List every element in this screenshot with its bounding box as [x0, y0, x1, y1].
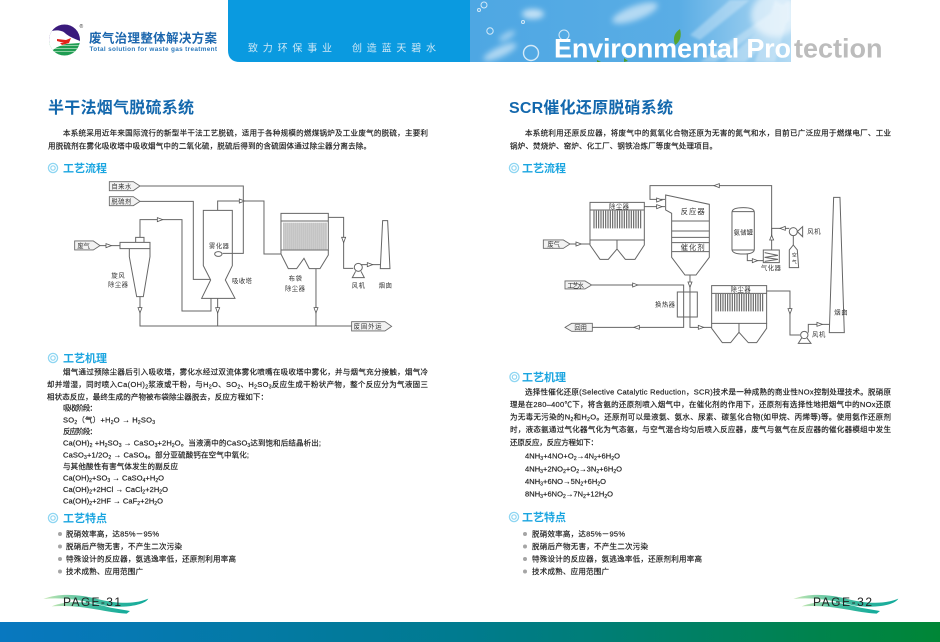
left mechanism text: 、H [241, 380, 254, 389]
chart: SCR denitrification flow diagram [543, 184, 848, 343]
right feature list: 脱硝效率高，达85%－95% [532, 529, 625, 539]
left heading: features [48, 511, 107, 525]
chart: semi-dry desulfurization flow diagram: 除尘器 [108, 279, 129, 288]
footer band [0, 622, 940, 642]
right mechanism text: 4NH [525, 452, 540, 461]
left mechanism text: 2 [108, 455, 111, 461]
left mechanism text: 3 [119, 443, 122, 449]
chart: SCR denitrification flow diagram: 回用 [574, 324, 587, 332]
chart: SCR denitrification flow diagram: 风机 [812, 329, 826, 338]
left mechanism text: 2 [142, 490, 145, 496]
left mechanism text: 达到饱和后结晶析出; [250, 438, 321, 448]
right mechanism text: 2 [583, 494, 586, 500]
chart: SCR denitrification flow diagram: 催化剂 [681, 243, 705, 252]
right mechanism text: +2NO [543, 465, 563, 474]
right heading: mechanism: 工艺机理 [522, 370, 566, 384]
right feature list: 特殊设计的反应器，氨逃逸率低，还原剂利用率高 [532, 554, 702, 564]
left mechanism text: O → H [114, 416, 138, 425]
left mechanism text: O [158, 474, 164, 483]
right mechanism text: 理是在280–400℃下，将含氨的还原剂喷入烟气中，在催化剂的作用下，还原剂有选择性地把烟气中的NOx还原 [510, 399, 892, 409]
left mechanism text: 浆液或干粉，与H [148, 379, 209, 389]
left mechanism text [47, 367, 428, 507]
right intro text [510, 128, 892, 151]
right mechanism text: 2 [580, 482, 583, 488]
left mechanism text: 3 [247, 443, 250, 449]
left mechanism text: +2H [140, 497, 154, 506]
right mechanism text: +O [566, 465, 576, 474]
right mechanism text: +12H [586, 490, 604, 499]
chart: semi-dry desulfurization flow diagram: 旋风 [111, 270, 125, 279]
right mechanism text: 和H [574, 413, 587, 422]
chart: semi-dry desulfurization flow diagram: 自来水 [111, 181, 132, 190]
chart: semi-dry desulfurization flow diagram: 废固外运 [354, 322, 382, 331]
left mechanism text: O [157, 497, 163, 506]
left mechanism text: 2 [89, 501, 92, 507]
right heading: features: 工艺特点 [522, 510, 566, 524]
header: blue slogan panel: 创造蓝天碧水 [352, 42, 436, 54]
left feature list: 特殊设计的反应器，氨逃逸率低，还原剂利用率高 [66, 554, 236, 564]
chart: SCR denitrification flow diagram: 氨储罐 [734, 227, 754, 236]
right mechanism text: 3 [540, 469, 543, 475]
left feature list [58, 529, 236, 576]
right mechanism text: 还原反应，反应方程如下： [510, 437, 598, 447]
right mechanism text: 4NH [525, 465, 540, 474]
chart: SCR denitrification flow diagram: 气 [792, 258, 797, 264]
header: logo: ® [80, 23, 84, 30]
right mechanism text: 2 [596, 469, 599, 475]
right heading: features [509, 510, 566, 524]
right mechanism text: O。还原剂可以是液氨、氨水、尿素、碳氢化合物(如甲烷、丙烯等)等。使用氨作还原剂 [590, 412, 891, 422]
left intro text: 用脱硫剂在雾化吸收塔中吸收烟气中的二氧化硫，脱硫后得到的含硫固体通过除尘器分离去除。 [48, 141, 371, 151]
right mechanism text: +6NO [543, 490, 563, 499]
right page number: PAGE-32 [813, 595, 872, 609]
chart: SCR denitrification flow diagram: 气化器 [761, 263, 782, 272]
left mechanism text: 2 [209, 385, 212, 391]
left heading: process flow: 工艺流程 [63, 161, 107, 175]
right feature list [523, 529, 702, 576]
left feature list: 技术成熟、应用范围广 [66, 566, 144, 576]
chart: semi-dry desulfurization flow diagram: 风机 [352, 281, 366, 290]
left mechanism text: 2 [111, 420, 114, 426]
left mechanism text: SO [257, 380, 269, 389]
left mechanism text: Ca(OH) [63, 497, 89, 506]
right mechanism text: 3 [540, 482, 543, 488]
chart: SCR denitrification flow diagram: 除尘器 [609, 201, 630, 210]
chart: semi-dry desulfurization flow diagram [75, 181, 392, 331]
chart: semi-dry desulfurization flow diagram: 烟囱 [379, 281, 392, 290]
right mechanism text: 2 [576, 469, 579, 475]
chart: SCR denitrification flow diagram: 空 [792, 252, 797, 258]
left mechanism text: 2 [145, 385, 148, 391]
right mechanism text: 选择性催化还原(Selective Catalytic Reduction，SCR)技术是一种成熟的商业性NOx控制处理技术。脱硝原 [525, 387, 892, 397]
left mechanism text: 4 [143, 478, 146, 484]
left mechanism text: → CaSO [111, 451, 145, 460]
left feature list: 脱硝后产物无害，不产生二次污染 [66, 541, 182, 551]
left heading: mechanism [48, 351, 107, 365]
header: company name: 废气治理整体解决方案 [89, 30, 217, 46]
chart: SCR denitrification flow diagram: 工艺水 [567, 280, 585, 289]
header: blue slogan panel [228, 0, 470, 62]
left mechanism text: 3 [107, 478, 110, 484]
chart: semi-dry desulfurization flow diagram: 除尘器 [285, 283, 306, 292]
right heading: process flow [509, 161, 566, 175]
right mechanism text: +6H [599, 465, 613, 474]
left heading: process flow [48, 161, 107, 175]
left feature list: 脱硝效率高，达85%－95% [66, 529, 159, 539]
right mechanism text: 3 [540, 494, 543, 500]
right mechanism text: 3 [540, 456, 543, 462]
right heading: process flow: 工艺流程 [522, 161, 566, 175]
left mechanism text: SO [63, 416, 74, 425]
right mechanism text: O [607, 490, 613, 499]
left mechanism text: 2 [138, 420, 141, 426]
left mechanism text: → CaSO [122, 439, 155, 448]
left mechanism text: +H [92, 439, 105, 448]
left mechanism text: 2 [74, 420, 77, 426]
right mechanism text: 2 [574, 456, 577, 462]
left mechanism text: Ca(OH) [63, 474, 89, 483]
left mechanism text: Ca(OH) [63, 485, 89, 494]
right feature list: 脱硝后产物无害，不产生二次污染 [532, 541, 648, 551]
chart: SCR denitrification flow diagram: 烟囱 [834, 308, 848, 317]
left page number [43, 595, 148, 614]
left mechanism text: 反应阶段： [63, 426, 97, 436]
left mechanism text: 3 [155, 443, 158, 449]
chart: semi-dry desulfurization flow diagram: 脱硫剂 [111, 196, 131, 205]
left mechanism text: +2HF → CaF [92, 497, 138, 506]
left mechanism text: 2 [154, 501, 157, 507]
right mechanism text: O [600, 477, 606, 486]
right page number [793, 595, 898, 614]
right mechanism text: 2 [587, 417, 590, 423]
banner title: tection [794, 34, 882, 64]
right mechanism text: +4NO+O [543, 452, 574, 461]
right mechanism text: 2 [570, 417, 573, 423]
right mechanism text: 为无毒无污染的N [510, 413, 570, 422]
left page title: 半干法烟气脱硫系统 [48, 98, 194, 117]
left mechanism text: 2 [105, 443, 108, 449]
left mechanism text: 相状态反应，最终生成的产物被布袋除尘器脱去，反应方程如下： [47, 392, 268, 402]
left mechanism text: 吸收阶段： [63, 403, 97, 413]
left mechanism text: 反应生成干粉状产物，整个反应分为气液固三 [272, 379, 428, 389]
left mechanism text: +2H [145, 485, 159, 494]
header: company name [89, 30, 218, 53]
chart: SCR denitrification flow diagram: 废气 [547, 239, 561, 248]
left heading: mechanism: 工艺机理 [63, 351, 107, 365]
left mechanism text: CaSO [63, 451, 84, 460]
left mechanism text: 与其他酸性有害气体发生的副反应 [63, 461, 178, 471]
left mechanism text: +2H [158, 439, 172, 448]
right mechanism text: 2 [604, 494, 607, 500]
right mechanism text: 2 [611, 456, 614, 462]
right mechanism text: →3N [579, 465, 596, 474]
left mechanism text: SO [108, 439, 119, 448]
left mechanism text: +SO [92, 474, 107, 483]
banner title: Environmental Pro [554, 34, 791, 64]
left mechanism text: SO [141, 416, 152, 425]
left mechanism text: 却并增湿，同时喷入Ca(OH) [47, 380, 145, 389]
right page title: SCR催化还原脱硝系统 [509, 98, 673, 117]
header: sky banner [470, 0, 799, 64]
right mechanism text: 4NH [525, 477, 540, 486]
left mechanism text: 2 [89, 478, 92, 484]
right mechanism text: →7N [566, 490, 583, 499]
right mechanism text: +6NO→5N [543, 477, 580, 486]
right mechanism text: 2 [563, 494, 566, 500]
right mechanism text: O [614, 452, 620, 461]
left intro text: 本系统采用近年来国际流行的新型半干法工艺脱硫，适用于各种规模的燃煤锅炉及工业废气的脱硫，主要利 [63, 128, 428, 138]
header: logo [49, 23, 84, 56]
right mechanism text: O [616, 465, 622, 474]
right heading: mechanism [510, 370, 566, 384]
left mechanism text: 2 [89, 490, 92, 496]
right mechanism text: 2 [613, 469, 616, 475]
left mechanism text: 2 [155, 478, 158, 484]
chart: semi-dry desulfurization flow diagram: 吸收塔 [232, 276, 253, 285]
left mechanism text: （气）+H [77, 415, 111, 425]
left mechanism text: 2 [237, 385, 240, 391]
header: company name: Total solution for waste gas treatment [90, 46, 218, 53]
left mechanism text: 2 [254, 385, 257, 391]
left mechanism text: O、SO [212, 380, 237, 389]
left mechanism text: 3 [269, 385, 272, 391]
left mechanism text: 烟气通过预除尘器后引入吸收塔，雾化水经过双流体雾化喷嘴在吸收塔中雾化，并与烟气充分接触，烟气冷 [63, 367, 428, 377]
left intro text [48, 128, 428, 151]
left mechanism text: 2 [172, 443, 175, 449]
left mechanism text: +H [145, 474, 155, 483]
left mechanism text: 2 [137, 501, 140, 507]
right mechanism text: 2 [597, 482, 600, 488]
right mechanism text: 2 [563, 469, 566, 475]
left mechanism text: +2HCl → CaCl [92, 485, 143, 494]
right intro text: 锅炉、焚烧炉、窑炉、化工厂、钢铁冶炼厂等废气处理项目。 [510, 141, 717, 151]
left mechanism text: O [162, 485, 168, 494]
left mechanism text: +1/2O [87, 451, 108, 460]
right mechanism text: 时，液态氨通过气化器气化为气态氨，与空气混合均匀后喷入反应器，废气与氨气在反应器的催化器模组中发生 [510, 424, 892, 434]
left page number: PAGE-31 [63, 595, 121, 609]
right mechanism text: +6H [583, 477, 597, 486]
right mechanism text: 2 [594, 456, 597, 462]
chart: semi-dry desulfurization flow diagram: 雾化器 [209, 241, 230, 250]
left mechanism text: 2 [159, 490, 162, 496]
left mechanism text: O。当液滴中的CaSO [175, 438, 247, 448]
chart: SCR denitrification flow diagram: 反应器 [681, 207, 705, 216]
right mechanism text: 8NH [525, 490, 540, 499]
right intro text: 本系统利用还原反应器，将废气中的氮氧化合物还原为无害的氮气和水，目前已广泛应用于燃煤电厂、工业 [525, 128, 892, 138]
header: blue slogan panel: 致力环保事业 [248, 42, 332, 54]
left mechanism text: 3 [84, 455, 87, 461]
right mechanism text: →4N [577, 452, 594, 461]
chart: SCR denitrification flow diagram: 风机 [807, 227, 821, 236]
left mechanism text: 2 [90, 443, 93, 449]
chart: semi-dry desulfurization flow diagram: 布袋 [289, 274, 303, 283]
right feature list: 技术成熟、应用范围广 [532, 566, 610, 576]
left mechanism text: Ca(OH) [63, 439, 89, 448]
right mechanism text: +6H [597, 452, 611, 461]
left heading: features: 工艺特点 [63, 511, 107, 525]
chart: SCR denitrification flow diagram: 换热器 [655, 300, 676, 309]
right mechanism text [510, 387, 892, 500]
left mechanism text: → CaSO [110, 474, 143, 483]
left mechanism text: 。部分亚硫酸钙在空气中氧化; [147, 450, 249, 460]
left mechanism text: 4 [145, 455, 148, 461]
chart: semi-dry desulfurization flow diagram: 废气 [77, 241, 91, 250]
left mechanism text: 3 [152, 420, 155, 426]
chart: SCR denitrification flow diagram: 除尘器 [731, 284, 751, 293]
